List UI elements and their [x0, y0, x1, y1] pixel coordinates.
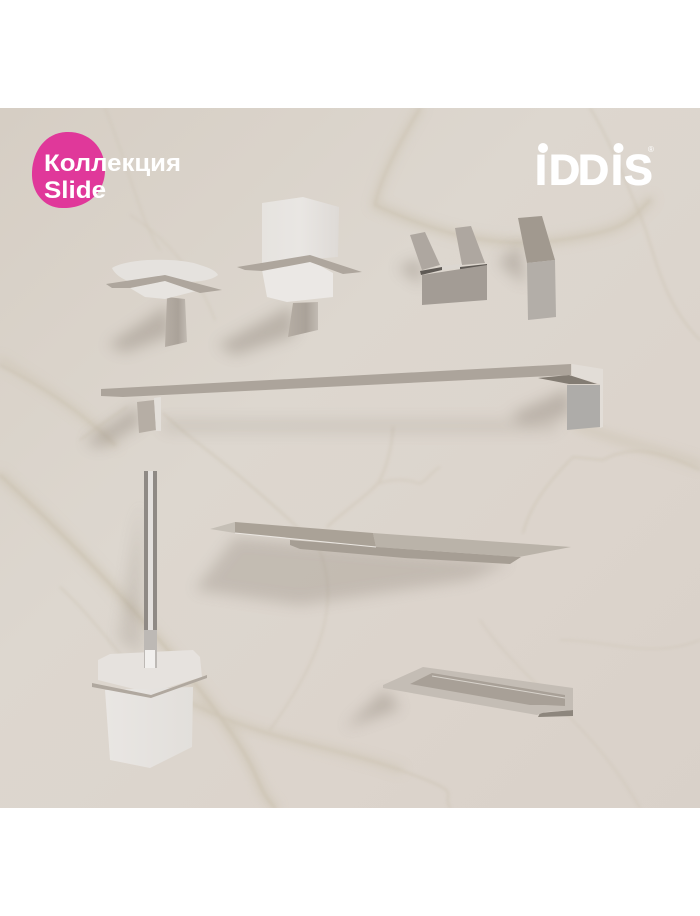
- collection title: Slide: [44, 177, 106, 204]
- shelf right plate: [373, 533, 571, 557]
- holder plate: [237, 255, 362, 274]
- logo: IDDIS: [535, 143, 654, 194]
- frosted glass lower: [262, 260, 333, 302]
- badge: Коллекция Slide: [32, 132, 181, 208]
- product: wall shelf: [210, 522, 571, 564]
- product: double hook: [410, 226, 487, 305]
- holder glass lower: [105, 687, 193, 768]
- product: paper holder: [383, 667, 573, 717]
- product: towel rail: [101, 364, 603, 433]
- product: glass tumbler holder: [237, 197, 362, 337]
- logo wordmark: IDDIS: [535, 146, 653, 194]
- pink blob: [32, 132, 105, 208]
- holder glass lower: [130, 281, 200, 299]
- product: toilet brush holder: [92, 471, 207, 768]
- holder shadow: [538, 710, 573, 717]
- marble wall background: [0, 108, 700, 808]
- bracket: [165, 297, 187, 347]
- bracket: [288, 302, 318, 337]
- product: soap dish: [106, 260, 222, 347]
- marble wide vein haze: [0, 108, 700, 808]
- frosted glass upper: [262, 197, 339, 263]
- brush holder glass upper: [98, 650, 202, 693]
- collection title: Коллекция: [44, 150, 181, 177]
- shelf upper tray: [235, 522, 376, 547]
- holder plate: [106, 275, 222, 293]
- shelf lower plate: [290, 540, 521, 564]
- handle lower section: [144, 630, 157, 668]
- holder plate: [383, 667, 573, 715]
- brush handle: [144, 471, 157, 668]
- product: single hook: [518, 216, 556, 320]
- soap dish bowl: [112, 260, 218, 284]
- registered mark: ®: [648, 145, 654, 154]
- holder opening: [410, 673, 565, 706]
- logo dots: [538, 143, 624, 153]
- holder ring: [92, 675, 207, 698]
- marble fine veins: [195, 213, 638, 720]
- soft shadows on the wall: [85, 245, 570, 728]
- rail bar: [101, 364, 571, 397]
- right bracket: [567, 385, 600, 430]
- left bracket: [137, 400, 156, 433]
